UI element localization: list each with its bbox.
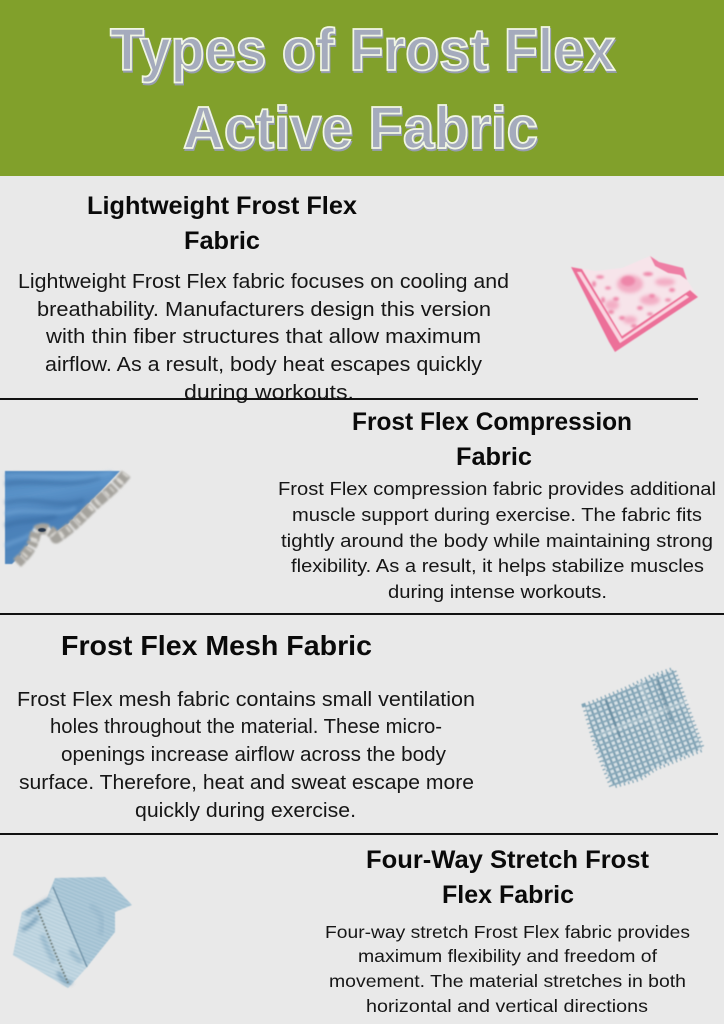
heading: mesh: Frost Flex Mesh Fabric: [61, 630, 372, 661]
text block: mesh: quickly during exercise.: [135, 800, 356, 822]
panel: compression fabric: [5, 408, 716, 602]
text block: mesh: holes throughout the material. These micro-: [50, 716, 442, 738]
text block: mesh: [17, 689, 475, 822]
panel: mesh fabric: [17, 630, 702, 822]
icon: denim scrap: [13, 877, 132, 988]
heading: lightweight: Lightweight Frost Flex: [87, 192, 357, 220]
text block: lightweight: breathability. Manufacturers design this version: [37, 299, 491, 321]
divider line 2: [0, 613, 724, 615]
heading: lightweight: [87, 192, 357, 255]
text block: mesh: Frost Flex mesh fabric contains small ventilation: [17, 689, 475, 711]
text block: four-way stretch: movement. The material stretches in both: [329, 971, 686, 991]
text block: mesh: surface. Therefore, heat and sweat escape more: [19, 772, 474, 794]
text block: compression: flexibility. As a result, it helps stabilize muscles: [291, 555, 704, 576]
heading: lightweight: Fabric: [184, 227, 260, 255]
heading: four-way stretch: Flex Fabric: [442, 881, 574, 909]
icon: blue frayed fabric: [5, 471, 126, 564]
title: [110, 17, 615, 161]
divider line 3: [0, 833, 718, 835]
text block: compression: muscle support during exercise. The fabric fits: [292, 504, 702, 525]
heading: compression: [352, 408, 632, 471]
text block: lightweight: during workouts.: [184, 382, 354, 404]
title: Types of Frost Flex: [110, 17, 615, 83]
text block: four-way stretch: [325, 922, 690, 1016]
heading: four-way stretch: Four-Way Stretch Frost: [366, 846, 650, 874]
text block: compression: during intense workouts.: [388, 581, 607, 602]
panel: four-way stretch fabric: [13, 846, 690, 1016]
heading: compression: Fabric: [456, 443, 532, 471]
icon: pink scarf: [571, 256, 698, 352]
text block: lightweight: with thin fiber structures that allow maximum: [45, 326, 481, 348]
text block: lightweight: airflow. As a result, body heat escapes quickly: [45, 354, 482, 376]
text block: compression: Frost Flex compression fabric provides additional: [278, 478, 716, 499]
divider line 1: [0, 398, 698, 400]
text block: lightweight: [18, 271, 509, 404]
text block: lightweight: Lightweight Frost Flex fabric focuses on cooling and: [18, 271, 509, 293]
icon: mesh swatch: [585, 670, 702, 786]
heading: four-way stretch: [366, 846, 650, 909]
text block: four-way stretch: maximum flexibility and freedom of: [358, 946, 657, 966]
text block: compression: [278, 478, 716, 602]
title: Active Fabric: [183, 95, 538, 161]
text block: compression: tightly around the body while maintaining strong: [281, 530, 713, 551]
text block: four-way stretch: horizontal and vertical directions: [366, 996, 648, 1016]
text block: mesh: openings increase airflow across the body: [61, 744, 446, 766]
heading: compression: Frost Flex Compression: [352, 408, 632, 436]
panel: lightweight fabric: [18, 192, 698, 404]
text block: four-way stretch: Four-way stretch Frost Flex fabric provides: [325, 922, 690, 942]
header banner: [0, 0, 724, 176]
